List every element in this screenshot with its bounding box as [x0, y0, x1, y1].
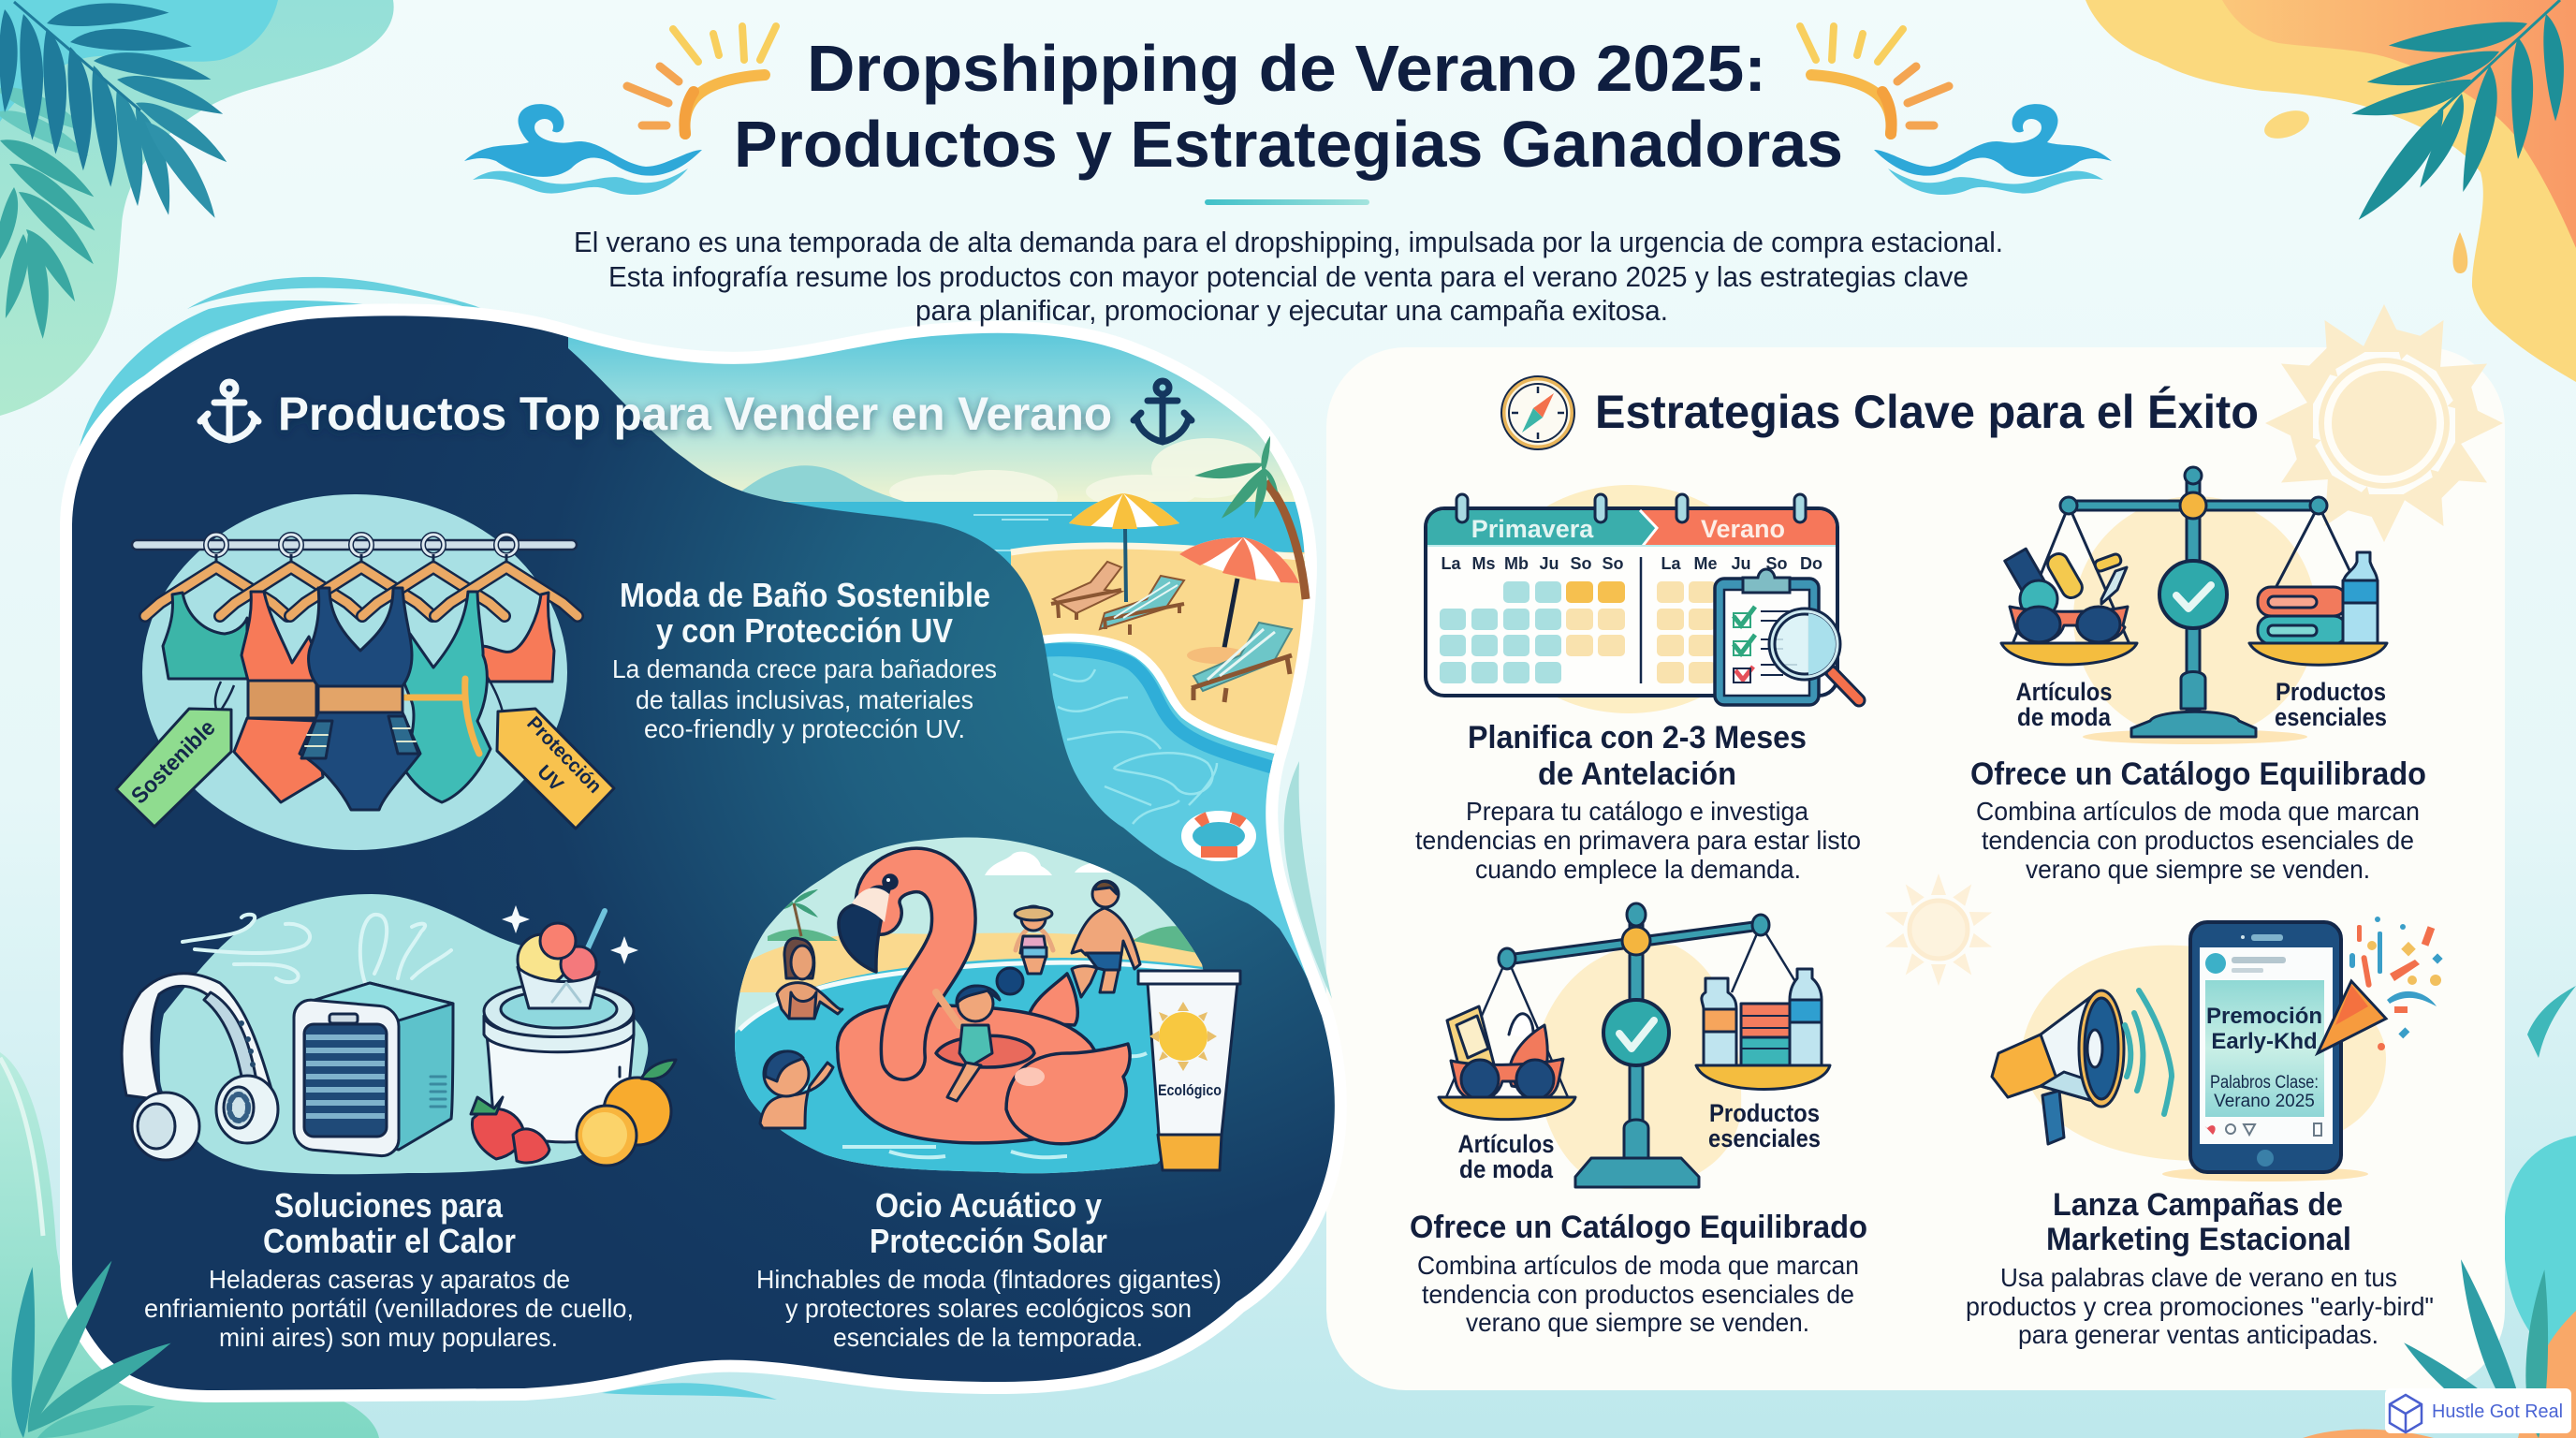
strategy text: catalogo two: verano que siempre se venden. [1466, 1308, 1809, 1337]
panel: estrategias clave [1326, 304, 2505, 1390]
flamingo float [838, 870, 1130, 1144]
icon: sunglasses [1451, 1059, 1563, 1100]
strategy: planifica calendar illustration: Mb [1504, 554, 1529, 573]
strategy text: catalogo one: Combina artículos de moda que marcan [1976, 797, 2420, 826]
product text: ocio acuatico [756, 1186, 1222, 1352]
product: moda de baño illustration [116, 494, 614, 850]
title underline [1205, 199, 1369, 205]
strategy text: catalogo one [1970, 756, 2426, 884]
strategy text: catalogo one: verano que siempre se venden. [2026, 855, 2370, 884]
left pan items [1447, 1006, 1547, 1091]
ice cream [518, 911, 605, 1008]
strategy text: planifica [1415, 720, 1861, 884]
tag: proteccion UV: UV [533, 761, 567, 796]
strategy text: marketing: Lanza Campañas de [2053, 1187, 2343, 1223]
strategy text: marketing: Marketing Estacional [2046, 1222, 2351, 1257]
strategy text: planifica: tendencias en primavera para estar listo [1415, 826, 1861, 855]
strategy: catalogo scale illustration two: esenciales [1708, 1124, 1821, 1152]
girl on float [936, 968, 1023, 1101]
strategy: planifica calendar illustration: Ju [1539, 554, 1559, 573]
strategy text: marketing: para generar ventas anticipadas. [2018, 1320, 2378, 1349]
strategy text: catalogo one: Ofrece un Catálogo Equilibrado [1970, 756, 2426, 792]
intro text: El verano es una temporada de alta demanda para el dropshipping, impulsada por la urgencia de compra estacional. [574, 226, 2003, 258]
intro text: Esta infografía resume los productos con mayor potencial de venta para el verano 2025 y las estrategias clave [608, 260, 1969, 293]
strategy text: catalogo two [1410, 1210, 1867, 1337]
icon: left sun and wave [464, 26, 776, 195]
right pan items [2258, 552, 2378, 644]
icon: compass [1501, 376, 1574, 449]
icon: phone: Premoción [2206, 1004, 2322, 1029]
strategy text: catalogo one: tendencia con productos esenciales de [1982, 826, 2414, 855]
product text: ocio acuatico: Hinchables de moda (flntadores gigantes) [756, 1265, 1222, 1294]
icon: phone [2190, 922, 2341, 1172]
strategy: catalogo scale illustration one: de moda [2017, 703, 2112, 731]
product text: soluciones calor: enfriamiento portátil (venilladores de cuello, [144, 1294, 634, 1323]
strategy: planifica calendar illustration: Primavera [1471, 515, 1594, 543]
strategy: catalogo scale illustration two [1439, 903, 1830, 1189]
icon: clipboard [1715, 569, 1819, 705]
swimsuit coral set [234, 592, 323, 802]
decoration: small sun [1882, 873, 1995, 986]
strategy: planifica calendar illustration: Me [1693, 554, 1718, 573]
intro text: para planificar, promocionar y ejecutar una campaña exitosa. [915, 294, 1668, 327]
product text: ocio acuatico: esenciales de la temporada. [833, 1323, 1143, 1352]
sunscreen tube: Ecológico [1158, 1081, 1222, 1099]
decoration: wave strokes around left panel [77, 277, 777, 1400]
icon: megaphone [1992, 990, 2124, 1144]
strategy text: catalogo two: tendencia con productos esenciales de [1422, 1280, 1854, 1309]
tag: sostenible: Sostenible [126, 715, 221, 809]
heading block: title: Dropshipping de Verano 2025: [807, 32, 1766, 105]
decoration: top right blob and palm [2086, 0, 2576, 382]
heading: productos top: Productos Top para Vender en Verano [278, 388, 1112, 440]
sparkles [502, 905, 638, 964]
icon: navy anchor [1134, 381, 1192, 442]
strategy: catalogo scale illustration one: Artículos [2016, 678, 2112, 706]
icon: sunglasses [2010, 607, 2128, 642]
product text: soluciones calor [144, 1186, 634, 1352]
tag: sostenible [116, 682, 234, 827]
strategy: planifica calendar illustration: So [1602, 554, 1624, 573]
decoration: panel sliver [1284, 761, 1332, 999]
icon: sound waves [2125, 990, 2172, 1114]
strategy: catalogo scale illustration one: esenciales [2275, 703, 2387, 731]
ice cream maker [484, 983, 634, 1142]
tag: proteccion UV: Protección [522, 712, 606, 798]
strategy text: catalogo two: Combina artículos de moda que marcan [1417, 1251, 1859, 1280]
strategy: planifica calendar illustration: La [1661, 554, 1681, 573]
strategy: planifica calendar illustration [1426, 485, 1859, 713]
product text: moda de baño: Moda de Baño Sostenible [620, 576, 990, 614]
right pan items [1702, 969, 1822, 1065]
rod [132, 540, 577, 550]
decoration: bottom left blob [0, 1052, 379, 1438]
product text: ocio acuatico: y protectores solares ecológicos son [785, 1294, 1192, 1323]
seated child [1015, 906, 1053, 974]
strategy: catalogo scale illustration one: Productos [2276, 678, 2386, 706]
intro text [574, 226, 2003, 327]
tag: proteccion UV [487, 676, 614, 829]
strategy: planifica calendar illustration: So [1570, 554, 1592, 573]
strategy text: planifica: cuando emplece la demanda. [1475, 855, 1801, 884]
portable cooler [294, 983, 453, 1157]
product text: ocio acuatico: Ocio Acuático y [875, 1186, 1102, 1225]
product text: moda de baño [612, 576, 997, 743]
decoration: top left blob and palm [0, 0, 394, 416]
strategy: planifica calendar illustration: La [1441, 554, 1461, 573]
fruit [471, 1060, 676, 1166]
headphones [122, 974, 278, 1160]
swimmer: woman [777, 938, 842, 1019]
product text: moda de baño: eco-friendly y protección UV. [644, 714, 965, 743]
panel: productos top (background scene) [72, 315, 1339, 1390]
product text: soluciones calor: Combatir el Calor [263, 1222, 516, 1260]
strategy text: planifica: Planifica con 2-3 Meses [1468, 720, 1807, 756]
left pan items [2005, 549, 2127, 618]
strategy: planifica calendar illustration: Verano [1701, 515, 1785, 543]
product text: moda de baño: La demanda crece para bañadores [612, 654, 997, 683]
strategy text: planifica: Prepara tu catálogo e investiga [1466, 797, 1808, 826]
strategy: catalogo scale illustration two: de moda [1459, 1155, 1554, 1183]
swimsuit teal one piece [403, 592, 490, 802]
icon: white anchor [200, 382, 258, 440]
heading: estrategias clave [1501, 376, 2259, 449]
icon: party cone and confetti [2318, 917, 2443, 1053]
icon: magnifier [1772, 611, 1859, 700]
swimmer: boy [760, 1051, 833, 1128]
product text: soluciones calor: mini aires) son muy populares. [219, 1323, 558, 1352]
icon: phone: Early-Khd [2211, 1029, 2318, 1054]
wind swirls [183, 915, 451, 983]
icon: right sun and wave [1800, 26, 2112, 195]
icon: phone: Verano 2025 [2214, 1092, 2315, 1111]
strategy text: planifica: de Antelación [1538, 756, 1736, 792]
umbrella yellow [1069, 493, 1179, 602]
strategy: planifica calendar illustration: Do [1800, 554, 1822, 573]
swimsuit coral top [480, 593, 554, 682]
swimsuit navy [300, 588, 420, 810]
heading block: title [734, 32, 1843, 181]
heading: estrategias clave: Estrategias Clave para el Éxito [1595, 386, 2259, 438]
strategy: catalogo scale illustration two: Productos [1709, 1099, 1820, 1127]
sunscreen tube [1138, 971, 1240, 1170]
watermark: Hustle Got Real [2432, 1401, 2563, 1422]
watermark [2385, 1388, 2571, 1433]
scale body [1439, 903, 1830, 1187]
scale body [2001, 467, 2387, 737]
chair 3 [1192, 623, 1292, 702]
illustration: beach umbrellas, chairs and palm [1051, 435, 1306, 859]
strategy: marketing illustration [1992, 917, 2443, 1181]
strategy: catalogo scale illustration one [2001, 467, 2387, 744]
chair 2 [1100, 576, 1184, 635]
product text: ocio acuatico: Protección Solar [870, 1222, 1107, 1260]
panel: dark overlay [72, 315, 1335, 1390]
decorative sun in panel [2265, 304, 2503, 542]
umbrella coral [1179, 537, 1299, 664]
strategy: planifica calendar illustration: Ju [1731, 554, 1751, 573]
icon: cube [2390, 1395, 2422, 1432]
icon: phone: Palabros Clase: [2210, 1073, 2319, 1093]
strategy: catalogo scale illustration two: Artículos [1458, 1130, 1554, 1158]
life ring [1183, 816, 1254, 859]
strategy text: catalogo two: Ofrece un Catálogo Equilibrado [1410, 1210, 1867, 1245]
strategy: planifica calendar illustration: Ms [1471, 554, 1496, 573]
swimsuit teal top [163, 593, 247, 679]
seated man [1072, 881, 1140, 997]
product text: moda de baño: y con Protección UV [656, 611, 953, 650]
product text: soluciones calor: Heladeras caseras y aparatos de [209, 1265, 570, 1294]
strategy text: marketing [1966, 1187, 2434, 1349]
decoration: bottom left leaves [0, 1255, 174, 1438]
strategy: planifica calendar illustration: So [1765, 554, 1788, 573]
product text: moda de baño: de tallas inclusivas, materiales [636, 685, 973, 714]
decoration: bottom right blob [2303, 986, 2576, 1438]
product: soluciones calor illustration [122, 894, 676, 1174]
strategy text: marketing: productos y crea promociones "early-bird" [1966, 1292, 2434, 1321]
strategy text: marketing: Usa palabras clave de verano en tus [2000, 1263, 2397, 1292]
decoration: bottom right leaves [2395, 1257, 2551, 1438]
chair 1 [1051, 562, 1121, 620]
product: ocio acuatico illustration [730, 833, 1240, 1180]
heading block: title: Productos y Estrategias Ganadoras [734, 108, 1843, 181]
product text: soluciones calor: Soluciones para [274, 1186, 504, 1225]
